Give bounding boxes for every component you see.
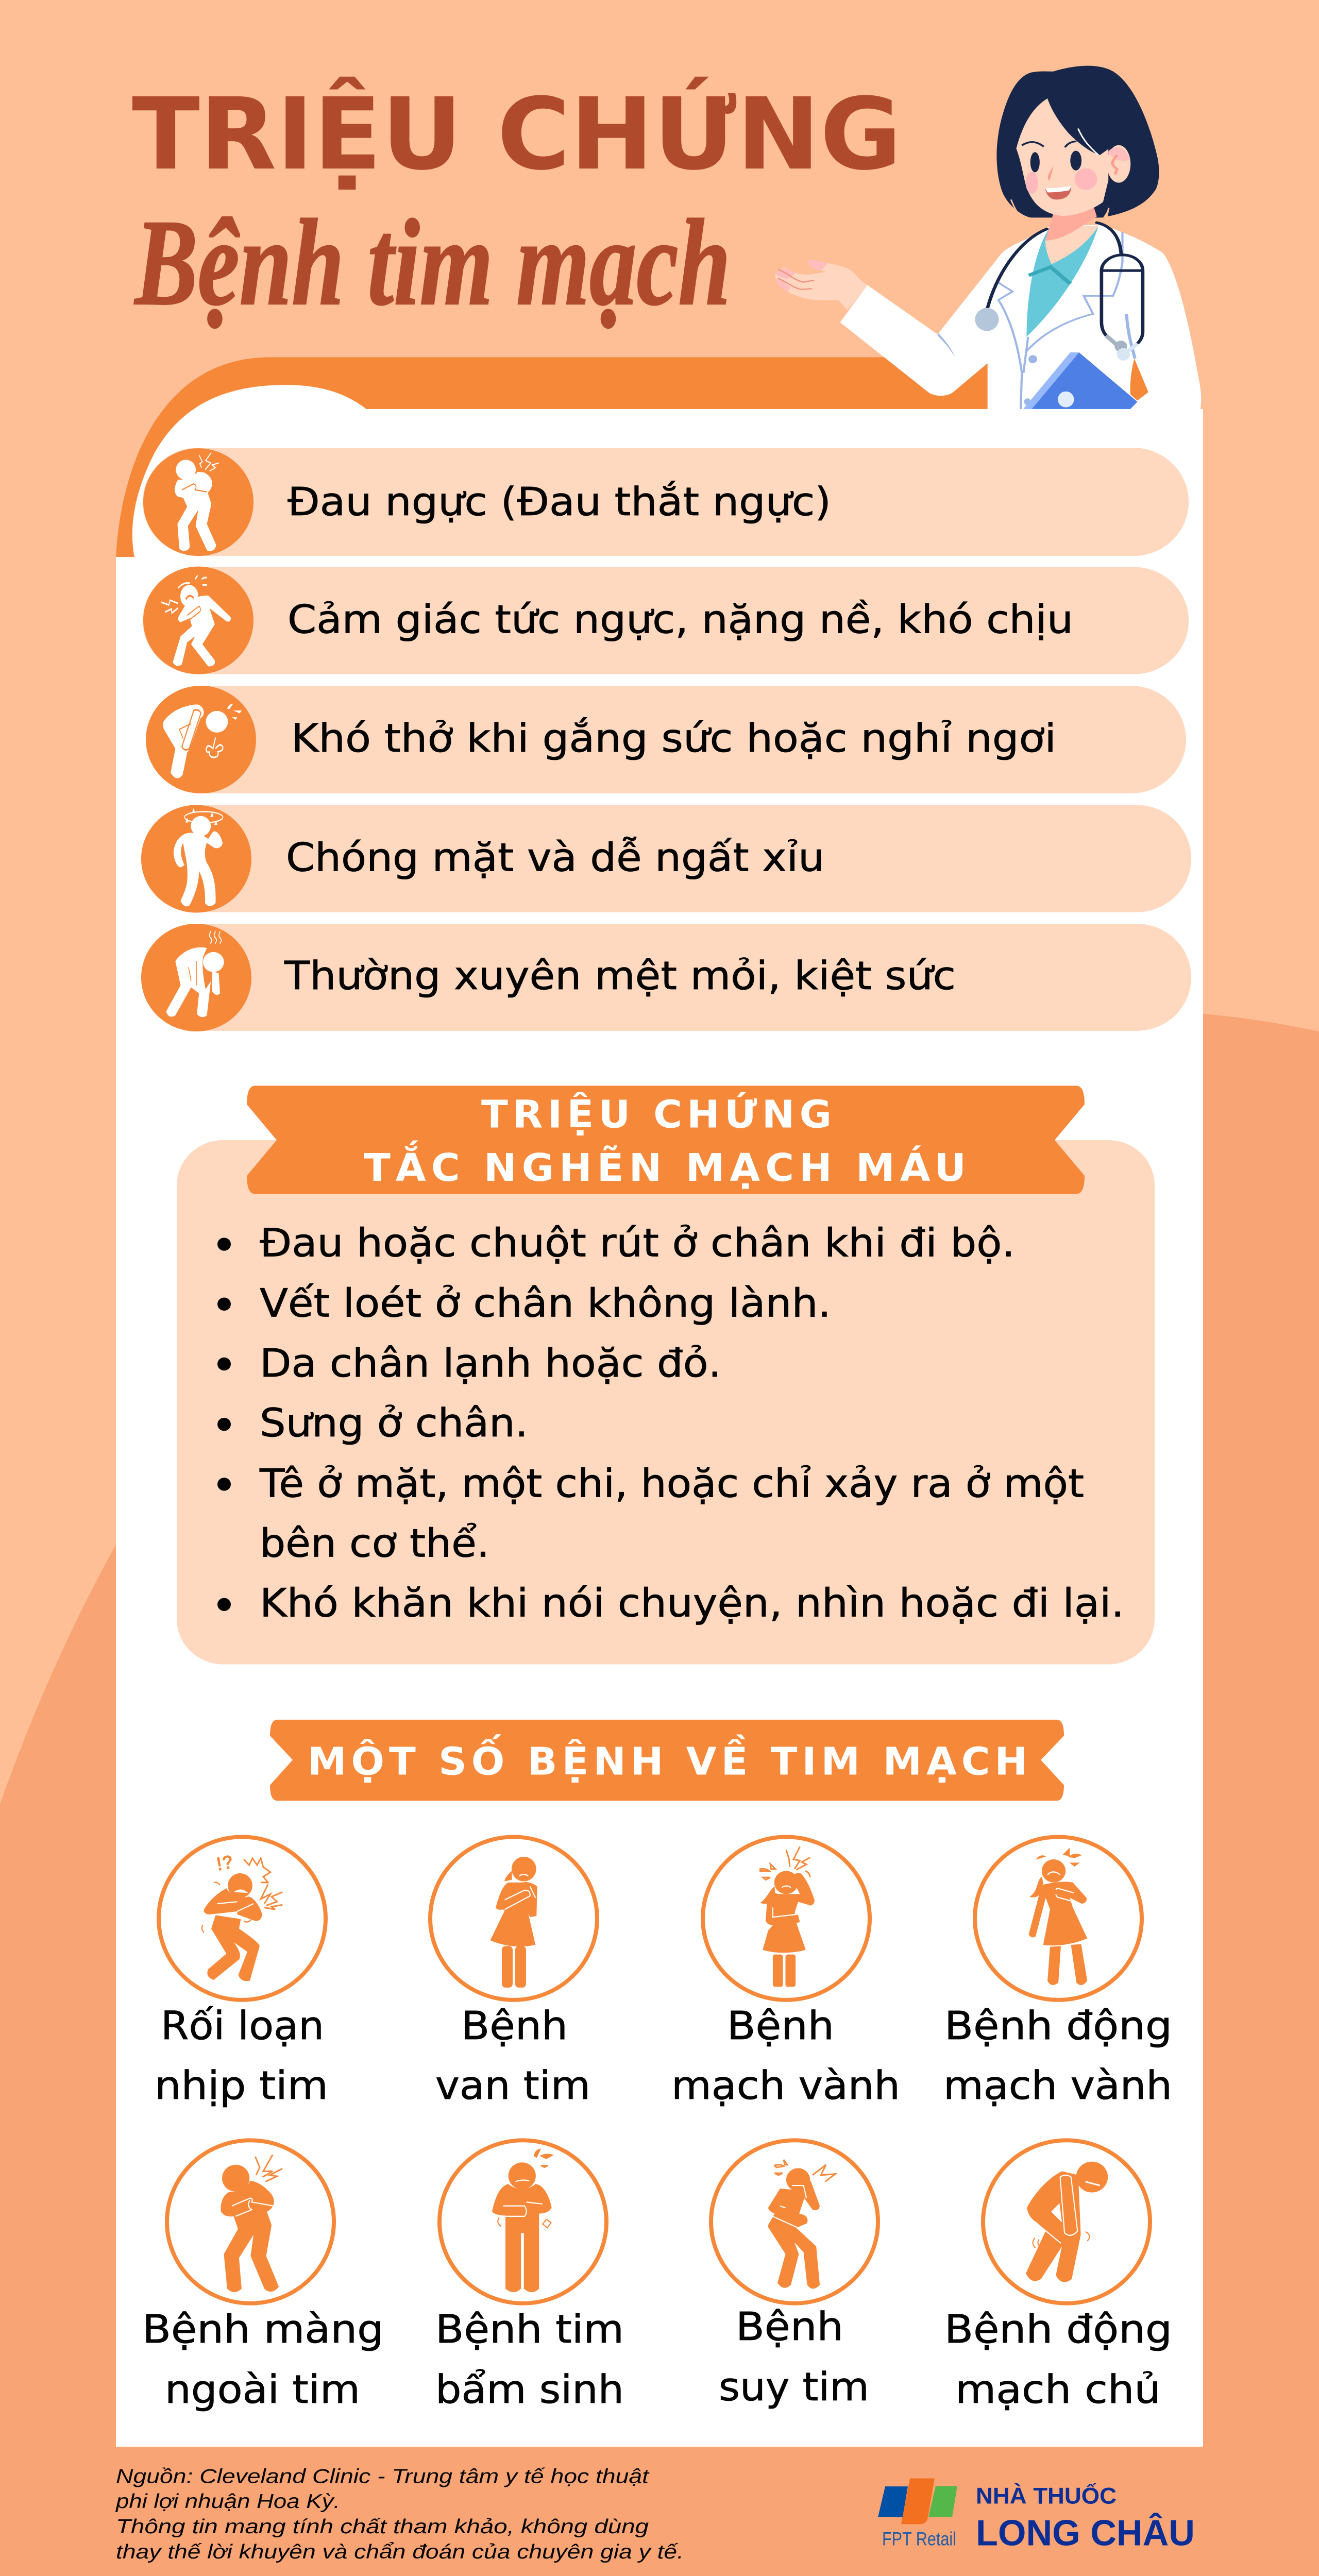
bullet list: Tê ở mặt, một chi, hoặc chỉ xảy ra ở một [259,1461,1084,1506]
icon: chest tightness [161,575,231,666]
disease 7 [711,2140,878,2410]
text: Thường xuyên mệt mỏi, kiệt sức [284,953,956,999]
heading ribbon [247,1086,1085,1194]
heading ribbon: diseases [270,1720,1064,1801]
label: Bệnh động [944,2003,1172,2049]
label: Bệnh [727,2003,834,2049]
symptom row 4 [141,805,1191,912]
bullet list [217,1220,1124,1626]
logo: Long Chau [878,2479,1195,2553]
symptom row 3 [146,686,1186,793]
disease 5: ngoài tim [165,2367,360,2413]
heading ribbon: TẮC NGHẼN MẠCH MÁU [364,1140,966,1190]
icon: shortness of breath [163,704,242,778]
symptom row 1 [143,448,1189,556]
icon: chest pain [175,452,218,551]
disease 4 [943,1837,1172,2109]
illustration: doctor [775,66,1201,412]
logo: Long Chau: LONG CHÂU [976,2513,1195,2553]
icon: pericardial disease [221,2155,282,2292]
icon: coronary artery disease [1029,1849,1087,1985]
icon: valve disease [491,1857,537,1988]
icon: heart failure [768,2160,835,2289]
disease 2 [430,1837,597,2109]
logo: Long Chau: NHÀ THUỐC [976,2482,1117,2509]
bullet list: Da chân lạnh hoặc đỏ. [260,1341,721,1386]
footer source note: Nguồn: Cleveland Clinic - Trung tâm y tế học thuật [116,2465,650,2487]
text: Cảm giác tức ngực, nặng nề, khó chịu [288,597,1073,642]
disease 2: van tim [435,2063,590,2109]
label: Bệnh màng [142,2307,384,2352]
disease 1: nhịp tim [155,2063,328,2109]
title: TRIỆU CHỨNG [132,76,902,192]
logo: Long Chau: FPT Retail [882,2528,956,2549]
label: Bệnh tim [435,2307,624,2352]
disease 8 [944,2140,1172,2413]
text: Chóng mặt và dễ ngất xỉu [286,835,824,880]
disease 6: bẩm sinh [435,2367,624,2413]
bullet list: Sưng ở chân. [260,1400,528,1446]
label: Bệnh [461,2003,568,2049]
icon: aortic disease [1026,2162,1108,2282]
panel: blockage symptoms [177,1086,1155,1664]
footer source note: thay thế lời khuyên và chẩn đoán của chuyên gia y tế. [116,2540,684,2563]
heading ribbon: diseases: MỘT SỐ BỆNH VỀ TIM MẠCH [308,1734,1027,1784]
icon: arrhythmia [202,1851,282,1981]
disease 4: mạch vành [943,2063,1172,2109]
disease 5 [142,2140,384,2413]
white panel [116,385,1203,2447]
icon: dizziness [174,808,223,906]
subtitle: Bệnh tim mạch [134,194,731,331]
disease 1 [155,1837,328,2109]
footer source note [115,2465,684,2563]
label: Bệnh [736,2304,843,2350]
bullet list: bên cơ thể. [260,1520,489,1566]
icon: fatigue [166,931,224,1017]
disease 3: mạch vành [671,2063,900,2109]
bullet list: Vết loét ở chân không lành. [260,1281,831,1326]
label: Bệnh động [944,2307,1172,2352]
disease 3 [671,1837,900,2109]
footer source note: Thông tin mang tính chất tham khảo, không dùng [116,2515,649,2538]
orange panel header [116,357,1005,557]
bullet list: Đau hoặc chuột rút ở chân khi đi bộ. [260,1220,1015,1266]
text: Khó thở khi gắng sức hoặc nghỉ ngơi [291,716,1056,761]
heading ribbon: TRIỆU CHỨNG [481,1092,832,1137]
icon: arrhythmia: !? [214,1851,235,1875]
icon: coronary disease [760,1846,815,1987]
footer source note: phi lợi nhuận Hoa Kỳ. [115,2490,340,2513]
disease 6 [435,2140,624,2413]
bullet list: Khó khăn khi nói chuyện, nhìn hoặc đi lại. [260,1581,1124,1626]
disease 8: mạch chủ [955,2367,1161,2413]
icon: congenital heart disease [492,2149,552,2292]
symptom row 5 [141,924,1191,1031]
symptom row 2 [143,567,1189,674]
text: Đau ngực (Đau thắt ngực) [288,479,831,525]
label: Rối loạn [161,2003,324,2049]
disease 7: suy tim [719,2364,869,2410]
